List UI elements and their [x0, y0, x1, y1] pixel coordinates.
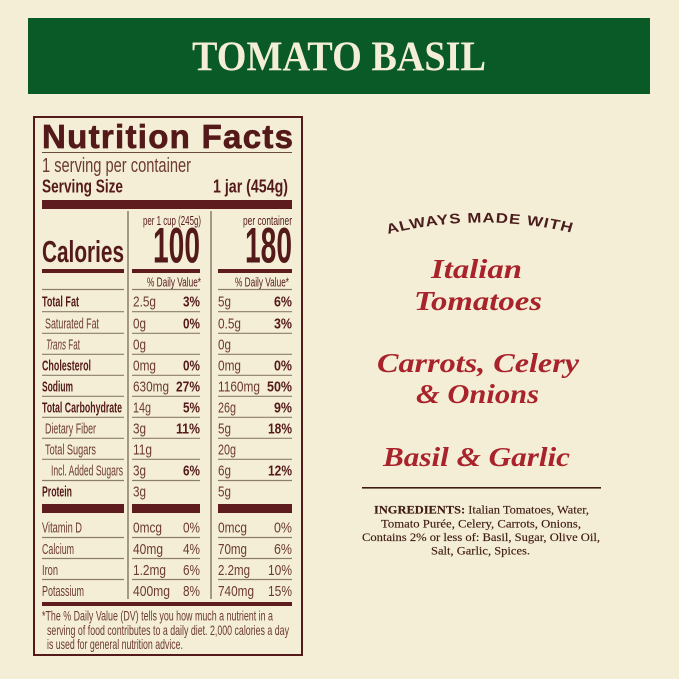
ingredients list: Salt, Garlic, Spices.: [431, 545, 530, 557]
row: total fat: Total Fat: [42, 294, 79, 311]
callout: carrots celery onions: [377, 347, 580, 409]
row: saturated fat: [45, 315, 292, 332]
row: protein: 5g: [218, 484, 231, 501]
callout: italian tomatoes: Italian: [430, 253, 522, 284]
ingredients list: Contains 2% or less of: Basil, Sugar, Olive Oil,: [362, 532, 600, 544]
row: total fat: 5g: [218, 294, 231, 311]
serving size: [42, 176, 288, 196]
footnote: [42, 608, 289, 652]
row: sodium: [42, 378, 292, 395]
row: saturated fat: 0%: [183, 315, 200, 332]
row: cholesterol: [42, 357, 292, 374]
row: total carbohydrate: 14g: [133, 399, 151, 416]
curved heading: always made with: ALWAYS MADE WITH: [388, 212, 573, 234]
calories: per 1 cup (245g): [143, 213, 201, 228]
callout: italian tomatoes: Tomatoes: [414, 285, 542, 316]
row: dietary fiber: 5g: [218, 420, 231, 437]
row: vitamin d: 0mcg: [133, 520, 162, 537]
row: saturated fat: 3%: [274, 315, 292, 332]
row: saturated fat: 0g: [133, 315, 146, 332]
row: sodium: 50%: [267, 378, 292, 395]
row: added sugars: [51, 462, 292, 479]
row: cholesterol: 0mg: [218, 357, 241, 374]
row: iron: 10%: [268, 562, 292, 579]
row: cholesterol: 0%: [183, 357, 200, 374]
row: vitamin d: 0%: [274, 520, 292, 537]
callout: carrots celery onions: & Onions: [416, 378, 539, 409]
row: total carbohydrate: 26g: [218, 399, 236, 416]
row: calcium: 6%: [274, 541, 292, 558]
row: potassium: 740mg: [218, 583, 254, 600]
row: protein: Protein: [42, 484, 72, 501]
calories: 100: [153, 218, 200, 274]
ingredients list: INGREDIENTS: Italian Tomatoes, Water,: [374, 504, 589, 516]
row: protein: 3g: [133, 484, 146, 501]
daily value header: % Daily Value*: [147, 274, 201, 290]
row: total carbohydrate: 9%: [274, 399, 292, 416]
row: iron: Iron: [42, 562, 58, 579]
footnote: is used for general nutrition advice.: [47, 636, 183, 652]
row: added sugars: 3g: [133, 462, 146, 479]
ingredients list: Tomato Purée, Celery, Carrots, Onions,: [381, 518, 581, 530]
row: total sugars: [45, 441, 236, 458]
row: calcium: [42, 541, 292, 558]
row: potassium: 8%: [183, 583, 200, 600]
calories: Calories: [42, 234, 124, 269]
ingredients list: [362, 504, 600, 557]
row: vitamin d: 0%: [183, 520, 200, 537]
row: saturated fat: 0.5g: [218, 315, 241, 332]
calories: 180: [245, 218, 292, 274]
row: total fat: 3%: [183, 294, 200, 311]
row: total sugars: 11g: [133, 441, 152, 458]
serving size: 1 jar (454g): [213, 176, 288, 196]
row: cholesterol: 0%: [274, 357, 292, 374]
daily value header: % Daily Value*: [235, 274, 289, 290]
calories: [42, 213, 292, 274]
row: total sugars: 20g: [218, 441, 236, 458]
row: sodium: Sodium: [42, 378, 73, 395]
row: trans fat: Trans Fat: [46, 336, 80, 353]
row: potassium: Potassium: [42, 583, 84, 600]
row: vitamin d: Vitamin D: [42, 520, 82, 537]
row: total fat: 2.5g: [133, 294, 156, 311]
title banner: [28, 18, 650, 94]
callout: carrots celery onions: Carrots, Celery: [377, 347, 580, 378]
row: potassium: [42, 583, 292, 600]
footnote: *The % Daily Value (DV) tells you how much a nutrient in a: [42, 608, 273, 624]
row: trans fat: 0g: [218, 336, 231, 353]
row: calcium: Calcium: [42, 541, 74, 558]
row: potassium: 15%: [268, 583, 292, 600]
calories: per container: [243, 213, 292, 228]
row: potassium: 400mg: [133, 583, 170, 600]
row: dietary fiber: Dietary Fiber: [45, 420, 96, 437]
row: calcium: 70mg: [218, 541, 247, 558]
row: total fat: [42, 294, 292, 311]
daily value header: [147, 274, 289, 290]
row: calcium: 4%: [183, 541, 200, 558]
row: iron: 1.2mg: [133, 562, 166, 579]
row: calcium: 40mg: [133, 541, 163, 558]
row: sodium: 1160mg: [218, 378, 260, 395]
row: total carbohydrate: 5%: [183, 399, 200, 416]
title banner: TOMATO BASIL: [192, 35, 486, 81]
row: iron: 2.2mg: [218, 562, 250, 579]
row: added sugars: 12%: [268, 462, 292, 479]
row: total sugars: Total Sugars: [45, 441, 96, 458]
row: trans fat: 0g: [133, 336, 146, 353]
row: dietary fiber: 18%: [268, 420, 292, 437]
servings per container: 1 serving per container: [42, 155, 191, 177]
row: vitamin d: [42, 520, 292, 537]
row: cholesterol: Cholesterol: [42, 357, 91, 374]
row: trans fat: [46, 336, 231, 353]
row: added sugars: 6%: [183, 462, 200, 479]
row: sodium: 27%: [176, 378, 200, 395]
serving size: Serving Size: [42, 176, 123, 196]
row: dietary fiber: 3g: [133, 420, 146, 437]
panel: nutrition facts: [34, 117, 302, 655]
row: dietary fiber: [45, 420, 292, 437]
row: iron: [42, 562, 292, 579]
row: added sugars: 6g: [218, 462, 231, 479]
row: cholesterol: 0mg: [133, 357, 156, 374]
row: sodium: 630mg: [133, 378, 169, 395]
callout: italian tomatoes: [414, 253, 542, 316]
row: total fat: 6%: [274, 294, 292, 311]
row: total carbohydrate: Total Carbohydrate: [42, 399, 122, 416]
row: saturated fat: Saturated Fat: [45, 315, 99, 332]
row: dietary fiber: 11%: [176, 420, 200, 437]
row: vitamin d: 0mcg: [218, 520, 247, 537]
footnote: serving of food contributes to a daily diet. 2,000 calories a day: [47, 622, 289, 638]
row: added sugars: Incl. Added Sugars: [51, 462, 123, 479]
row: total carbohydrate: [42, 399, 292, 416]
row: protein: [42, 484, 231, 501]
row: iron: 6%: [183, 562, 200, 579]
callout: basil and garlic: Basil & Garlic: [382, 441, 570, 472]
heading: nutrition facts: Nutrition Facts: [42, 118, 293, 155]
